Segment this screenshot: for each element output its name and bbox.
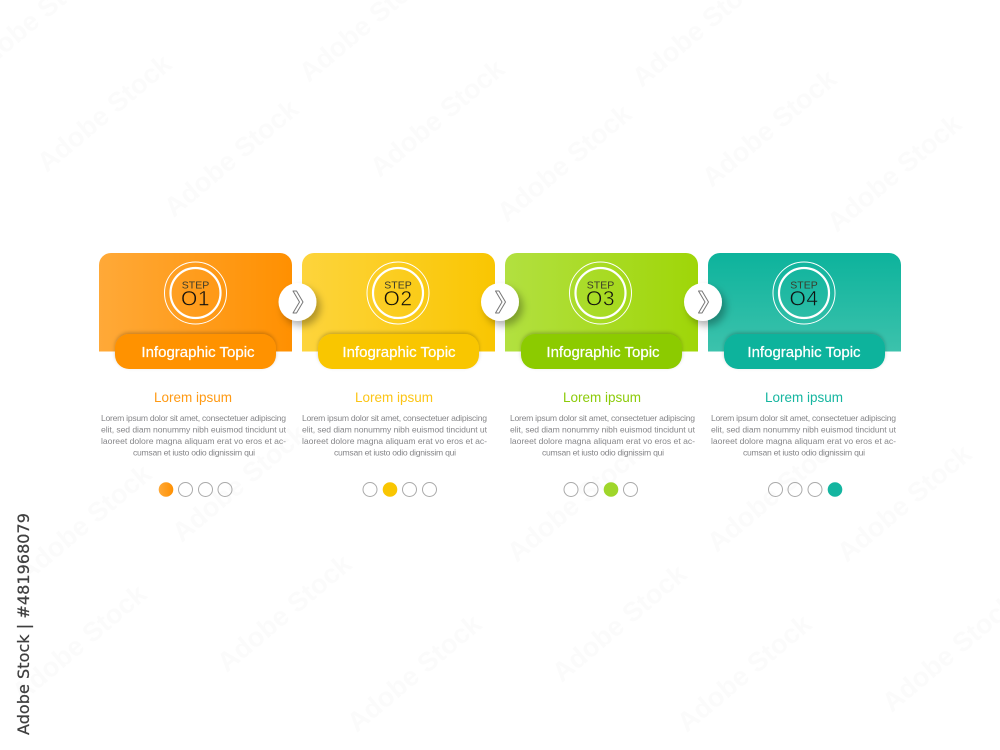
card 3 background — [505, 253, 698, 352]
step 1 body text: Lorem ipsum dolor sit amet, consectetuer adipiscing — [101, 413, 286, 423]
background watermark: Adobe Stock — [696, 63, 843, 193]
background watermark: Adobe Stock — [821, 108, 968, 238]
step 4 body text: Lorem ipsum dolor sit amet, consectetuer adipiscing — [711, 413, 896, 423]
background watermark: Adobe Stock — [364, 53, 511, 183]
step 2 body text: Lorem ipsum dolor sit amet, consectetuer adipiscing — [302, 413, 487, 423]
background watermark: Adobe Stock — [671, 608, 818, 738]
arrow: step 3 to 4 — [684, 283, 722, 321]
step 1 topic pill: Infographic Topic — [141, 344, 255, 361]
background watermark: Adobe Stock — [11, 458, 158, 588]
panel: step 3 — [505, 253, 698, 497]
arrow: step 1 to 2 — [278, 283, 316, 321]
step 4 badge: O4 — [789, 288, 819, 310]
background watermark: Adobe Stock — [831, 438, 978, 568]
step 2 heading: Lorem ipsum — [355, 390, 433, 405]
step 3 badge: STEP — [587, 280, 614, 292]
background watermark: Adobe Stock — [546, 558, 693, 688]
step 3 badge: O3 — [586, 288, 615, 310]
arrow: step 2 to 3 — [481, 283, 519, 321]
step 1 topic pill — [115, 334, 276, 369]
background watermark: Adobe Stock — [211, 548, 358, 678]
step 1 body text: elit, sed diam nonummy nibh euismod tincidunt ut — [101, 424, 287, 434]
step 2 body text: laoreet dolore magna aliquam erat vo eros et ac- — [302, 436, 487, 446]
step 4 topic pill: Infographic Topic — [747, 344, 861, 361]
step 2 body text: elit, sed diam nonummy nibh euismod tincidunt ut — [302, 424, 488, 434]
step 2 progress dots — [363, 482, 436, 497]
background watermark: Adobe Stock — [166, 418, 313, 548]
step 3 heading: Lorem ipsum — [563, 390, 641, 405]
panel: step 1 — [99, 253, 292, 497]
panel: step 4 — [708, 253, 901, 497]
step 4 body text: laoreet dolore magna aliquam erat vo eros et ac- — [711, 436, 896, 446]
step 1 badge: STEP — [182, 280, 209, 292]
panel: step 2 — [302, 253, 495, 497]
background watermark: Adobe Stock — [701, 428, 848, 558]
step 2 badge: STEP — [384, 280, 412, 292]
step 3 topic pill: Infographic Topic — [546, 344, 660, 361]
card 2 background — [302, 253, 495, 352]
step 4 heading: Lorem ipsum — [765, 390, 843, 405]
step 4 body text: cumsan et iusto odio dignissim qui — [743, 448, 865, 458]
step 3 body text: elit, sed diam nonummy nibh euismod tincidunt ut — [510, 424, 696, 434]
step 4 progress dots — [768, 482, 842, 497]
card 4 background — [708, 253, 901, 352]
step 1 heading: Lorem ipsum — [154, 390, 232, 405]
background watermark: Adobe Stock — [491, 98, 638, 228]
stock id caption: Adobe Stock | #481968079 — [14, 513, 33, 735]
background watermark: Adobe Stock — [501, 438, 648, 568]
step 3 progress dots — [564, 482, 638, 497]
step 2 topic pill — [318, 334, 479, 369]
step 1 badge: O1 — [181, 288, 210, 310]
step 3 badge — [570, 262, 632, 324]
background watermark: Adobe Stock — [31, 48, 178, 178]
step 1 body text: laoreet dolore magna aliquam erat vo eros et ac- — [101, 436, 286, 446]
step 3 body text: cumsan et iusto odio dignissim qui — [542, 448, 664, 458]
step 3 body text: laoreet dolore magna aliquam erat vo eros et ac- — [510, 436, 695, 446]
step 2 topic pill: Infographic Topic — [342, 344, 456, 361]
step 3 body text: Lorem ipsum dolor sit amet, consectetuer adipiscing — [510, 413, 695, 423]
step 3 topic pill — [521, 334, 682, 369]
step 4 badge — [773, 262, 835, 324]
step 2 body text: cumsan et iusto odio dignissim qui — [334, 448, 456, 458]
step 4 topic pill — [724, 334, 885, 369]
background watermark: Adobe Stock — [6, 578, 153, 708]
background watermark: Adobe Stock — [341, 608, 488, 738]
background watermark: Adobe Stock — [158, 93, 305, 223]
step 2 badge: O2 — [383, 288, 413, 310]
step 1 body text: cumsan et iusto odio dignissim qui — [133, 448, 255, 458]
step 4 body text: elit, sed diam nonummy nibh euismod tincidunt ut — [711, 424, 897, 434]
card 1 background — [99, 253, 292, 352]
step 1 progress dots — [159, 482, 232, 497]
step 2 badge — [367, 262, 429, 324]
step 4 badge: STEP — [790, 280, 818, 292]
step 1 badge — [164, 262, 226, 324]
